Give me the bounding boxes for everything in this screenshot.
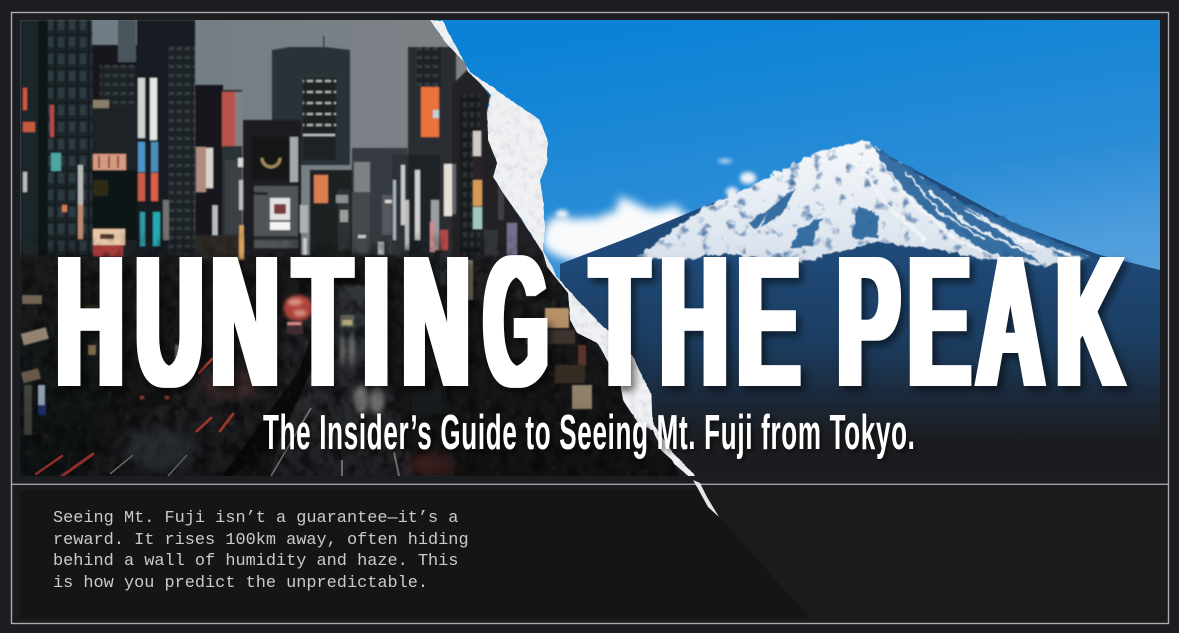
main title: THE — [591, 218, 800, 426]
divider — [12, 484, 1168, 485]
subtitle: The Insider’s Guide to Seeing Mt. Fuji from Tokyo. — [263, 407, 915, 460]
sky — [430, 20, 1160, 476]
mountain dark base — [560, 145, 1160, 476]
intro text block: is how you predict the unpredictable. — [53, 574, 428, 593]
street texture noise — [20, 230, 680, 476]
mid buildings — [195, 47, 545, 307]
torn paper tip over divider — [693, 480, 719, 517]
main title — [56, 216, 1124, 426]
street details — [21, 260, 592, 435]
lower text panel background — [12, 485, 1169, 624]
mountain snow cap — [636, 141, 1095, 266]
main title: PEAK — [837, 218, 1124, 426]
far buildings — [310, 148, 408, 268]
distant tower — [272, 36, 350, 165]
photo: Mt. Fuji side — [430, 20, 1160, 476]
torn paper strip — [430, 20, 695, 476]
dark backing for right-hand city block — [440, 120, 690, 480]
near left towers — [20, 20, 246, 320]
intro text block: behind a wall of humidity and haze. This — [53, 552, 458, 571]
photo: rainy Tokyo side — [20, 20, 700, 480]
main title: HUNTIN — [56, 218, 470, 426]
hero photo collage — [20, 20, 1160, 517]
intro text block: reward. It rises 100km away, often hiding — [53, 531, 469, 550]
hazy sky — [20, 20, 500, 320]
intro text block: Seeing Mt. Fuji isn’t a guarantee—it’s a — [53, 509, 458, 528]
street canyon — [20, 254, 447, 476]
clouds — [542, 159, 756, 262]
main title: G — [484, 216, 548, 426]
light trails and lane markings — [36, 351, 455, 477]
city bottom darkening — [20, 296, 680, 476]
intro text block — [53, 509, 469, 593]
